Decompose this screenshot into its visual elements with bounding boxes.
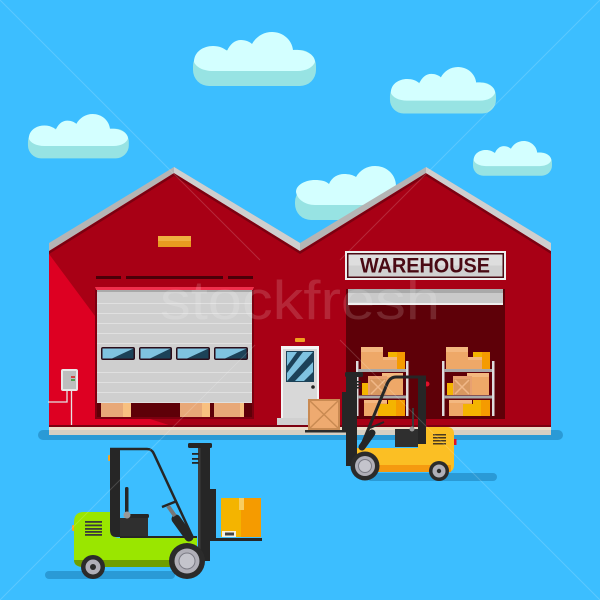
yellow forklift	[305, 372, 456, 481]
small door	[277, 338, 319, 425]
door windows	[101, 347, 248, 360]
base strip	[49, 425, 551, 435]
sign: warehouse	[345, 251, 506, 280]
cloud: left	[28, 114, 129, 158]
wooden crate	[308, 399, 340, 430]
shelf rack 2	[442, 347, 494, 416]
wall: sunlit side	[49, 254, 175, 427]
green forklift	[72, 443, 262, 579]
ground shadow: yellow forklift	[367, 473, 497, 481]
pallets under door	[101, 403, 244, 417]
cloud: behind roof	[295, 166, 396, 220]
roller door	[95, 276, 254, 419]
ground shadow: building	[38, 430, 563, 440]
wall	[49, 172, 551, 428]
open door with shelves	[346, 289, 505, 419]
roof	[49, 167, 551, 251]
ground shadow: green forklift	[45, 571, 175, 579]
vent light	[158, 236, 191, 247]
cargo box	[221, 498, 261, 537]
shelf rack 1	[356, 347, 408, 416]
sign: warehouse: WAREHOUSE	[360, 254, 490, 278]
electric box	[48, 369, 78, 425]
watermark: stockfresh	[160, 269, 440, 331]
roof shadow	[49, 173, 551, 254]
cloud: top centre	[193, 32, 316, 86]
cloud: top right	[390, 67, 496, 114]
cloud: far right	[473, 141, 552, 176]
